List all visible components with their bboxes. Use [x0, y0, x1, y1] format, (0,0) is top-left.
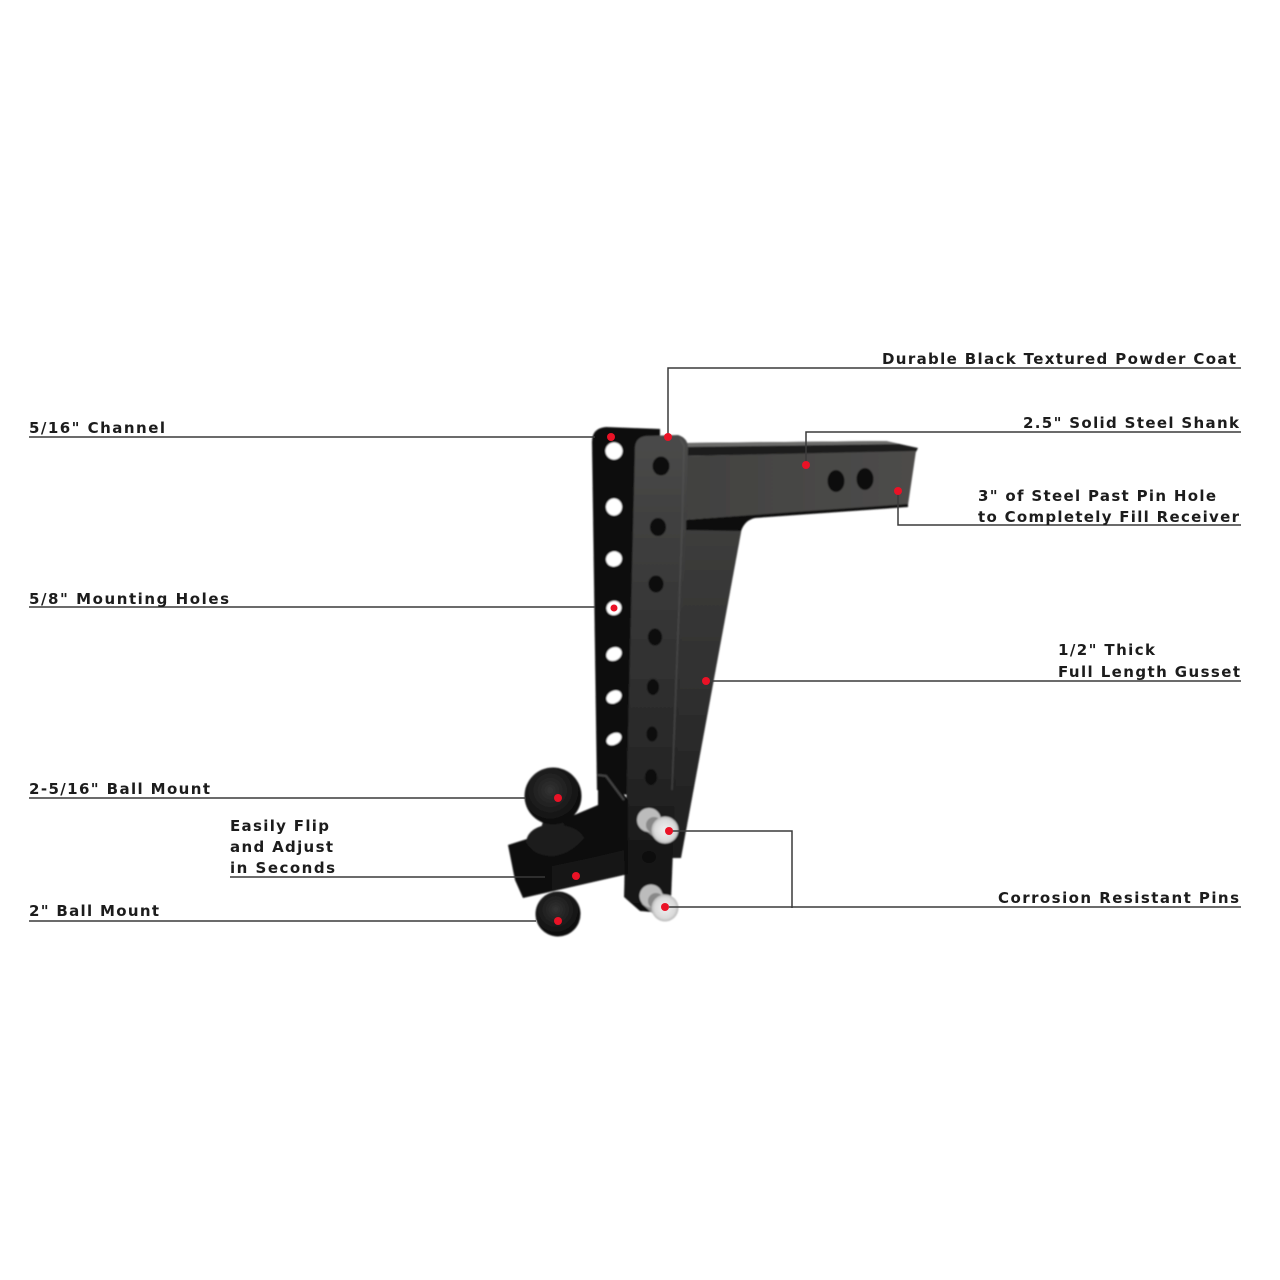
- callout: mounting holes: 5/8" Mounting Holes: [29, 590, 229, 608]
- hitch product photo: [508, 427, 918, 936]
- upper pin: [637, 808, 678, 844]
- front plate edge highlight: [672, 438, 684, 790]
- callout: corrosion resistant pins: Corrosion Resistant Pins: [998, 889, 1239, 907]
- callout: flip and adjust: Easily Flip: [230, 817, 329, 835]
- rear channel mounting holes: [604, 442, 624, 748]
- callout: gusset: 1/2" Thick: [1058, 641, 1156, 659]
- callout: channel: [29, 419, 615, 441]
- callout: solid steel shank: 2.5" Solid Steel Shank: [1023, 414, 1240, 432]
- callout: powder coat: Durable Black Textured Powder Coat: [882, 350, 1236, 368]
- gusset: [666, 525, 742, 858]
- callout: lower ball mount: 2" Ball Mount: [29, 902, 159, 920]
- front plate holes: [642, 456, 670, 863]
- lower pin: [640, 884, 678, 922]
- callout: powder coat: [664, 350, 1241, 441]
- ball mount head: [508, 772, 628, 898]
- callout: mounting holes: [29, 590, 618, 612]
- shank: [682, 441, 918, 531]
- callout: steel past pin hole: 3" of Steel Past Pin Hole: [978, 487, 1216, 505]
- callout: flip and adjust: [230, 817, 580, 880]
- callout: gusset: Full Length Gusset: [1058, 663, 1240, 681]
- 2-5/16 inch ball: [524, 768, 582, 824]
- callout: flip and adjust: in Seconds: [230, 859, 335, 877]
- front plate: [624, 435, 688, 913]
- 2 inch ball: [536, 892, 580, 936]
- callout: upper ball mount: [29, 780, 562, 802]
- callout: corrosion resistant pins: [661, 827, 1241, 911]
- callout: channel: 5/16" Channel: [29, 419, 165, 437]
- callout: solid steel shank: [802, 414, 1241, 469]
- callout: lower ball mount: [29, 902, 562, 925]
- callout: gusset: [702, 641, 1241, 685]
- callout: steel past pin hole: to Completely Fill Receiver: [978, 508, 1240, 526]
- callout: steel past pin hole: [894, 487, 1241, 526]
- callout: upper ball mount: 2-5/16" Ball Mount: [29, 780, 210, 798]
- rear channel plate: [592, 427, 660, 800]
- callout: flip and adjust: and Adjust: [230, 838, 333, 856]
